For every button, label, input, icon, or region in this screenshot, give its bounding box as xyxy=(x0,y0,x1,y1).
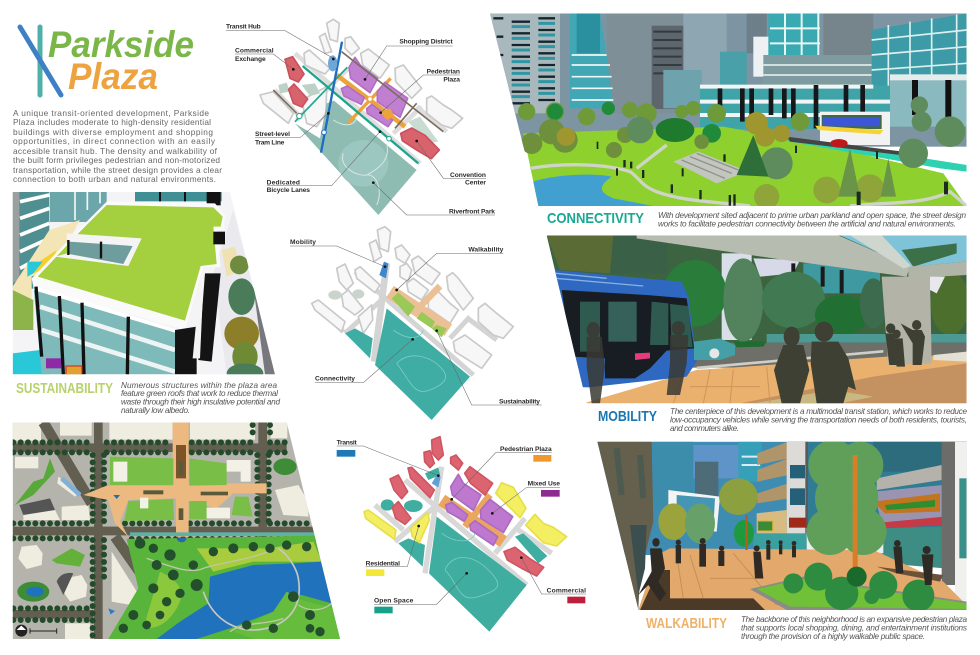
panel: connectivity park rendering xyxy=(490,13,967,209)
streets xyxy=(375,467,552,585)
label: Dedicated Bicycle Lanes: Dedicated xyxy=(267,179,300,186)
caption: walkability: The backbone of this neighborhood is an expansive pedestrian plaza xyxy=(741,615,967,624)
balconies xyxy=(757,442,788,503)
people xyxy=(597,142,948,206)
label: Mobility xyxy=(290,239,386,268)
transit block xyxy=(379,262,388,278)
intro text block: connection to both urban and natural environments. xyxy=(13,174,216,184)
legend: Commercial: Commercial xyxy=(547,588,586,595)
pedestrians xyxy=(638,538,933,602)
pocket parks xyxy=(15,458,55,505)
label: Pedestrian Plaza xyxy=(379,68,460,114)
label: Dedicated Bicycle Lanes: Bicycle Lanes xyxy=(267,187,310,194)
caption: mobility: and commuters alike. xyxy=(670,424,739,433)
caption: walkability xyxy=(741,615,967,641)
caption: mobility: low-occupancy vehicles while serving the transportation needs of both residents, tourists, xyxy=(670,416,967,424)
label: Sustainability: Sustainability xyxy=(499,399,540,406)
label: Pedestrian Plaza: Plaza xyxy=(443,76,460,83)
streets and buildings xyxy=(312,227,513,375)
caption: mobility xyxy=(670,407,967,433)
mixed use buildings xyxy=(446,474,513,545)
caption: sustainability: waste through their high insulative potential and xyxy=(121,398,280,406)
label: Connectivity: Connectivity xyxy=(315,376,355,383)
label: Transit Hub: Transit Hub xyxy=(226,24,261,31)
heading: walkability: WALKABILITY xyxy=(646,615,727,632)
planter xyxy=(750,577,967,610)
car xyxy=(694,338,735,360)
canopy and column xyxy=(840,236,966,266)
commercial buildings xyxy=(390,437,544,576)
label: Convention Center: Center xyxy=(465,180,486,187)
caption: sustainability: naturally low albedo. xyxy=(121,406,190,415)
pedestrian plaza paths xyxy=(337,75,405,127)
legend: Open Space xyxy=(374,572,468,613)
diagram: program axonometric xyxy=(226,19,495,215)
plaza and lawns xyxy=(83,422,267,537)
caption: connectivity: works to facilitate pedestrian connectivity between the artificial and natural environments. xyxy=(658,220,956,228)
open space xyxy=(381,467,547,632)
label: Shopping District: Shopping District xyxy=(399,39,453,46)
legend: Residential: Residential xyxy=(366,560,400,567)
street trees xyxy=(13,425,317,638)
green roofs xyxy=(392,293,447,337)
label: Mobility: Mobility xyxy=(290,239,316,246)
left tower xyxy=(490,13,560,113)
panel: mobility transit rendering xyxy=(547,235,969,403)
caption: mobility: The centerpiece of this development is a multimodal transit station, which works to reduce xyxy=(670,407,967,416)
label: Street-level Tram Line: Street-level xyxy=(255,131,290,138)
pedestrian plaza footprint xyxy=(390,286,448,330)
label: Commercial Exchange: Commercial xyxy=(235,48,274,55)
bicycle lanes and promenades xyxy=(273,52,443,163)
heading: sustainability: SUSTAINABILITY xyxy=(16,380,113,397)
panel: walkability plaza rendering xyxy=(597,440,967,612)
heading: connectivity: CONNECTIVITY xyxy=(547,210,644,227)
mixed use buildings xyxy=(341,57,408,127)
storefront xyxy=(820,112,890,145)
legend: Pedestrian Plaza xyxy=(450,446,552,501)
transit block xyxy=(432,475,441,487)
park trees xyxy=(518,96,965,209)
label: Shopping District xyxy=(364,39,453,81)
residential buildings xyxy=(364,483,567,546)
intro text block: transportation, while the street design provides a clear xyxy=(13,165,222,175)
riverfront park xyxy=(108,536,342,639)
right tower xyxy=(872,14,966,86)
label: Walkability xyxy=(395,246,504,291)
legend: Transit: Transit xyxy=(337,440,357,447)
intro text block: accesible transit hub. The density and walkability of xyxy=(13,146,218,156)
streets and surrounding buildings xyxy=(260,19,463,163)
car xyxy=(830,139,848,148)
caption: sustainability: feature green roofs that work to reduce thermal xyxy=(121,389,278,398)
cream building footprints xyxy=(13,422,308,639)
legend: Transit xyxy=(337,440,440,477)
caption: connectivity: With development sited adjacent to prime urban parkland and open space, the street design xyxy=(658,211,966,220)
intro text block: A unique transit-oriented development, Parkside xyxy=(13,108,209,118)
water xyxy=(533,175,653,206)
label: Dedicated Bicycle Lanes xyxy=(267,130,381,194)
glass towers xyxy=(753,37,770,77)
label: Street-level Tram Line xyxy=(255,112,330,147)
paving xyxy=(583,355,967,403)
pedestrian plaza xyxy=(442,495,503,542)
label: Street-level Tram Line: Tram Line xyxy=(255,140,285,147)
legend: Open Space: Open Space xyxy=(374,598,414,605)
trees and shrubs xyxy=(658,440,934,612)
foliage xyxy=(663,258,969,342)
amphitheatre steps xyxy=(673,152,740,183)
diagram: urban design principles axonometric xyxy=(290,227,542,420)
label: Walkability: Walkability xyxy=(468,246,504,253)
label: Convention Center: Convention xyxy=(450,172,486,179)
legend: Mixed Use xyxy=(491,481,560,515)
paving xyxy=(638,548,967,610)
teal tower xyxy=(570,13,613,108)
road network xyxy=(13,422,317,639)
caption: walkability: through the provision of a highly walkable public space. xyxy=(741,632,925,641)
logo: Parkside Plaza title: Plaza xyxy=(68,56,158,97)
logo: Parkside Plaza title xyxy=(20,24,194,97)
left colonnade xyxy=(597,442,653,610)
tram line xyxy=(321,42,342,153)
legend: Mixed Use: Mixed Use xyxy=(528,481,560,488)
diagram: land use axonometric xyxy=(337,437,586,632)
dark tower xyxy=(652,26,683,109)
intro text block: Plaza includes moderate to high-density residential xyxy=(13,117,211,127)
open space xyxy=(345,308,470,420)
caption: sustainability xyxy=(121,381,280,415)
legend: Pedestrian Plaza: Pedestrian Plaza xyxy=(500,446,552,453)
intro text block: opportunities, in direct connection with an easily xyxy=(13,136,216,146)
label: Pedestrian Plaza: Pedestrian xyxy=(427,68,460,75)
road xyxy=(547,343,967,368)
commercial buildings xyxy=(285,57,439,159)
transit hub xyxy=(328,55,337,71)
terraced block xyxy=(763,55,872,77)
label: Transit Hub xyxy=(226,24,335,60)
label: Connectivity xyxy=(315,338,414,383)
tram xyxy=(555,270,697,387)
label: Commercial Exchange xyxy=(235,48,295,71)
logo: Parkside Plaza title: Parkside xyxy=(48,24,194,65)
lawn xyxy=(523,127,967,206)
intro text block xyxy=(13,108,222,184)
label: Riverfront Park xyxy=(372,181,495,215)
low building xyxy=(700,86,890,129)
intro text block: buildings with diverse employment and shopping xyxy=(13,127,213,137)
label: Sustainability xyxy=(435,329,542,406)
heading: mobility: MOBILITY xyxy=(598,408,657,425)
label: Convention Center xyxy=(415,140,486,187)
label: Commercial Exchange: Exchange xyxy=(235,56,266,63)
panel: sustainability green roof rendering xyxy=(13,192,279,383)
label: Riverfront Park: Riverfront Park xyxy=(449,208,495,215)
riverfront park xyxy=(295,101,417,215)
caption: connectivity xyxy=(658,211,966,228)
legend: Commercial xyxy=(520,556,586,603)
panel: site plan xyxy=(13,422,343,639)
caption: sustainability: Numerous structures within the plaza area xyxy=(121,381,277,390)
icon: north arrow and scale bar xyxy=(15,625,57,637)
intro text block: the built form privileges pedestrian and non-motorized xyxy=(13,155,220,165)
right block xyxy=(788,442,967,555)
caption: walkability: that supports local shopping, dining, and entertainment institutions xyxy=(741,624,967,632)
legend: Residential xyxy=(366,525,420,576)
silhouettes xyxy=(774,320,925,403)
